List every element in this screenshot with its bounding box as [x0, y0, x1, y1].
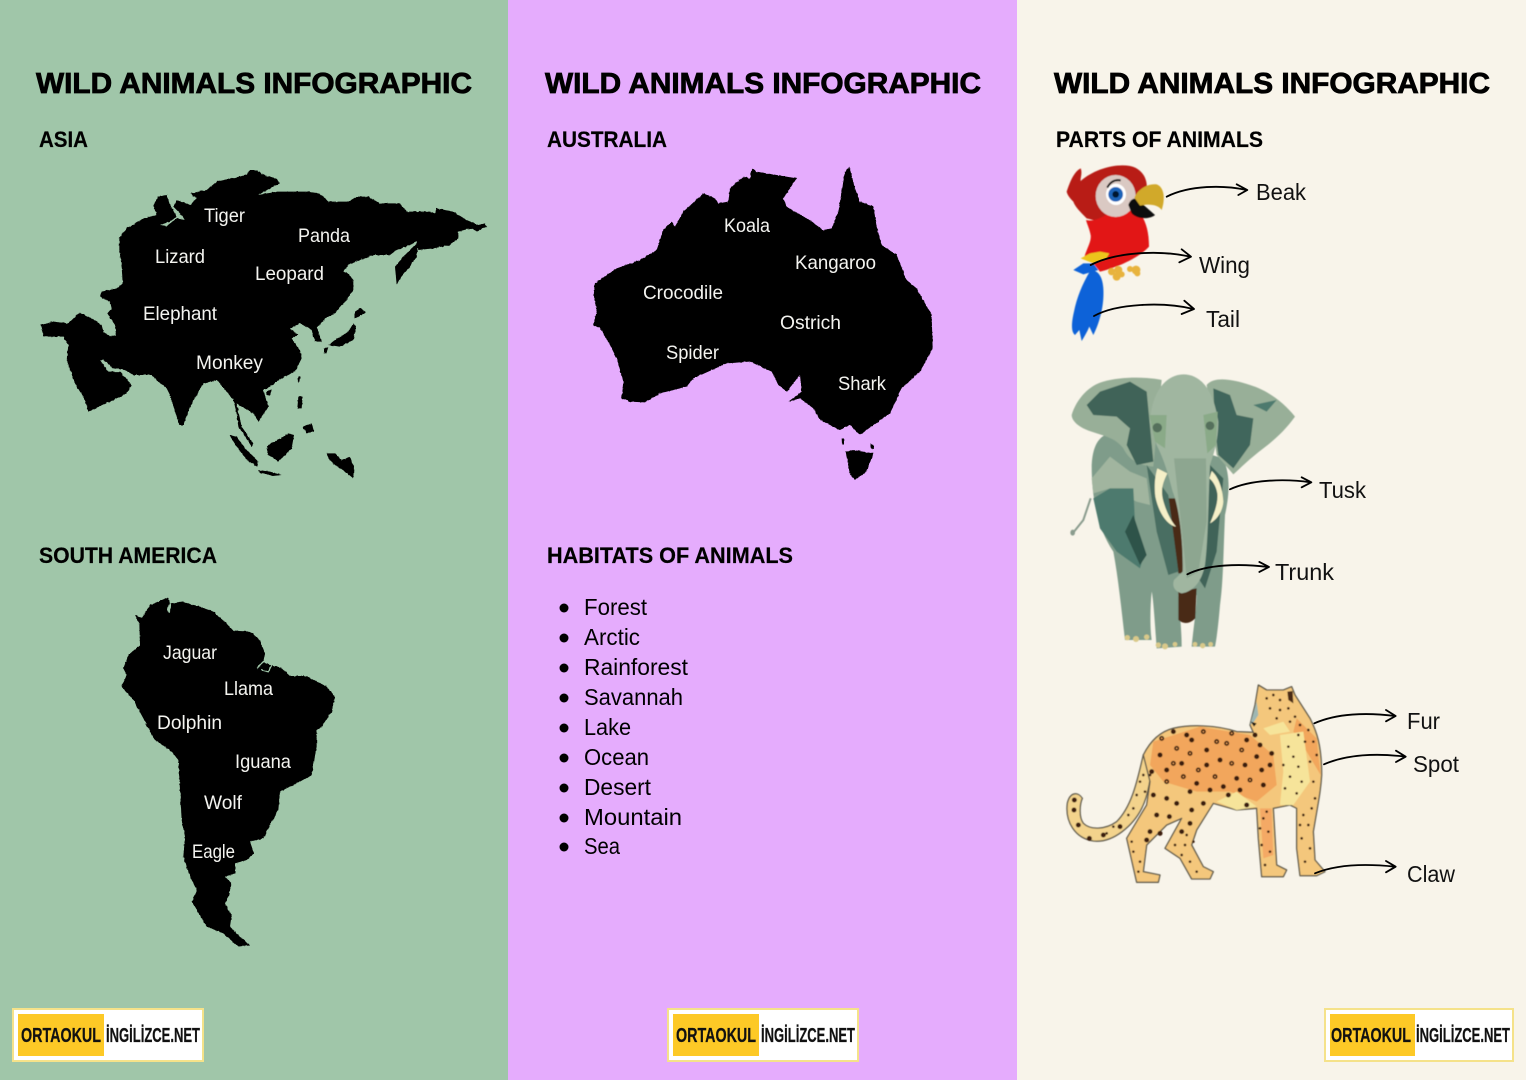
labels: Australia animals: Koala — [724, 215, 770, 237]
logo: center: İNGİLİZCE.NET — [761, 1024, 855, 1047]
logo: right — [1325, 1009, 1513, 1061]
label: Tail: Tail — [1206, 306, 1240, 332]
panel: Australia and habitats — [508, 0, 1017, 1080]
list: habitats: Arctic — [584, 624, 640, 650]
heading: South America: SOUTH AMERICA — [39, 543, 217, 568]
logo: left — [13, 1009, 203, 1061]
list: habitats: Sea — [584, 833, 620, 859]
map: South America — [122, 597, 335, 947]
labels: South America animals: Wolf — [204, 792, 243, 814]
label: Wing: Wing — [1199, 252, 1250, 278]
logo: right: ORTAOKUL — [1331, 1025, 1411, 1047]
heading: Habitats of animals: HABITATS OF ANIMALS — [547, 543, 793, 568]
label: Tusk: Tusk — [1319, 477, 1366, 503]
logo: center — [668, 1009, 858, 1061]
labels: South America animals — [157, 642, 291, 863]
label: Spot: Spot — [1413, 751, 1460, 777]
panel: parts of animals — [1017, 0, 1526, 1080]
labels: Asia animals: Monkey — [196, 352, 263, 374]
arrow: tusk — [1230, 477, 1311, 489]
arrow: fur — [1314, 710, 1396, 723]
list: habitats: Desert — [584, 774, 652, 800]
list: habitats: Lake — [584, 714, 631, 740]
heading: Asia: ASIA — [39, 127, 88, 152]
arrow: claw — [1315, 861, 1396, 873]
arrow: wing — [1091, 249, 1191, 265]
labels: South America animals: Llama — [224, 678, 273, 700]
logo: left: İNGİLİZCE.NET — [106, 1024, 200, 1047]
labels: South America animals: Jaguar — [163, 642, 217, 664]
title: WILD ANIMALS INFOGRAPHIC — [1054, 68, 1490, 100]
labels: Australia animals: Shark — [838, 373, 886, 395]
labels: South America animals: Dolphin — [157, 712, 222, 734]
panel: Asia and South America — [0, 0, 508, 1080]
list: habitats: Ocean — [584, 744, 649, 770]
arrow: trunk — [1187, 562, 1269, 574]
labels: Asia animals — [143, 205, 350, 374]
map: Asia — [41, 170, 487, 478]
labels: South America animals: Iguana — [235, 751, 291, 773]
heading: Australia: AUSTRALIA — [547, 127, 667, 152]
labels: South America animals: Eagle — [192, 841, 235, 863]
labels: Asia animals: Leopard — [255, 263, 324, 285]
illustration: parrot — [1067, 165, 1164, 341]
labels: Asia animals: Tiger — [204, 205, 245, 227]
labels: Australia animals: Kangaroo — [795, 252, 876, 274]
arrow: tail — [1094, 301, 1194, 316]
arrow: beak — [1167, 184, 1247, 197]
logo: center: ORTAOKUL — [676, 1025, 756, 1047]
labels: Australia animals — [643, 215, 886, 395]
list: habitats — [560, 594, 689, 859]
list: habitats: Mountain — [584, 804, 682, 830]
illustration: elephant — [1070, 374, 1295, 649]
label: Fur: Fur — [1407, 708, 1440, 734]
arrow: spot — [1324, 751, 1406, 764]
label: Claw: Claw — [1407, 861, 1455, 887]
label: Trunk: Trunk — [1275, 559, 1334, 585]
title: WILD ANIMALS INFOGRAPHIC — [545, 68, 981, 100]
list: habitats: Savannah — [584, 684, 683, 710]
labels: Australia animals: Spider — [666, 342, 719, 364]
list: habitats: Rainforest — [584, 654, 689, 680]
labels: Asia animals: Elephant — [143, 303, 218, 325]
list: habitats: Forest — [584, 594, 648, 620]
illustration: leopard — [1067, 685, 1325, 882]
labels: Australia animals: Crocodile — [643, 282, 723, 304]
labels: Australia animals: Ostrich — [780, 312, 841, 334]
title: WILD ANIMALS INFOGRAPHIC — [36, 68, 472, 100]
label: Beak: Beak — [1256, 179, 1306, 205]
labels: Asia animals: Lizard — [155, 246, 205, 268]
labels: Asia animals: Panda — [298, 225, 350, 247]
heading: Parts of animals: PARTS OF ANIMALS — [1056, 127, 1263, 152]
logo: left: ORTAOKUL — [21, 1025, 101, 1047]
map: Australia — [593, 167, 933, 480]
